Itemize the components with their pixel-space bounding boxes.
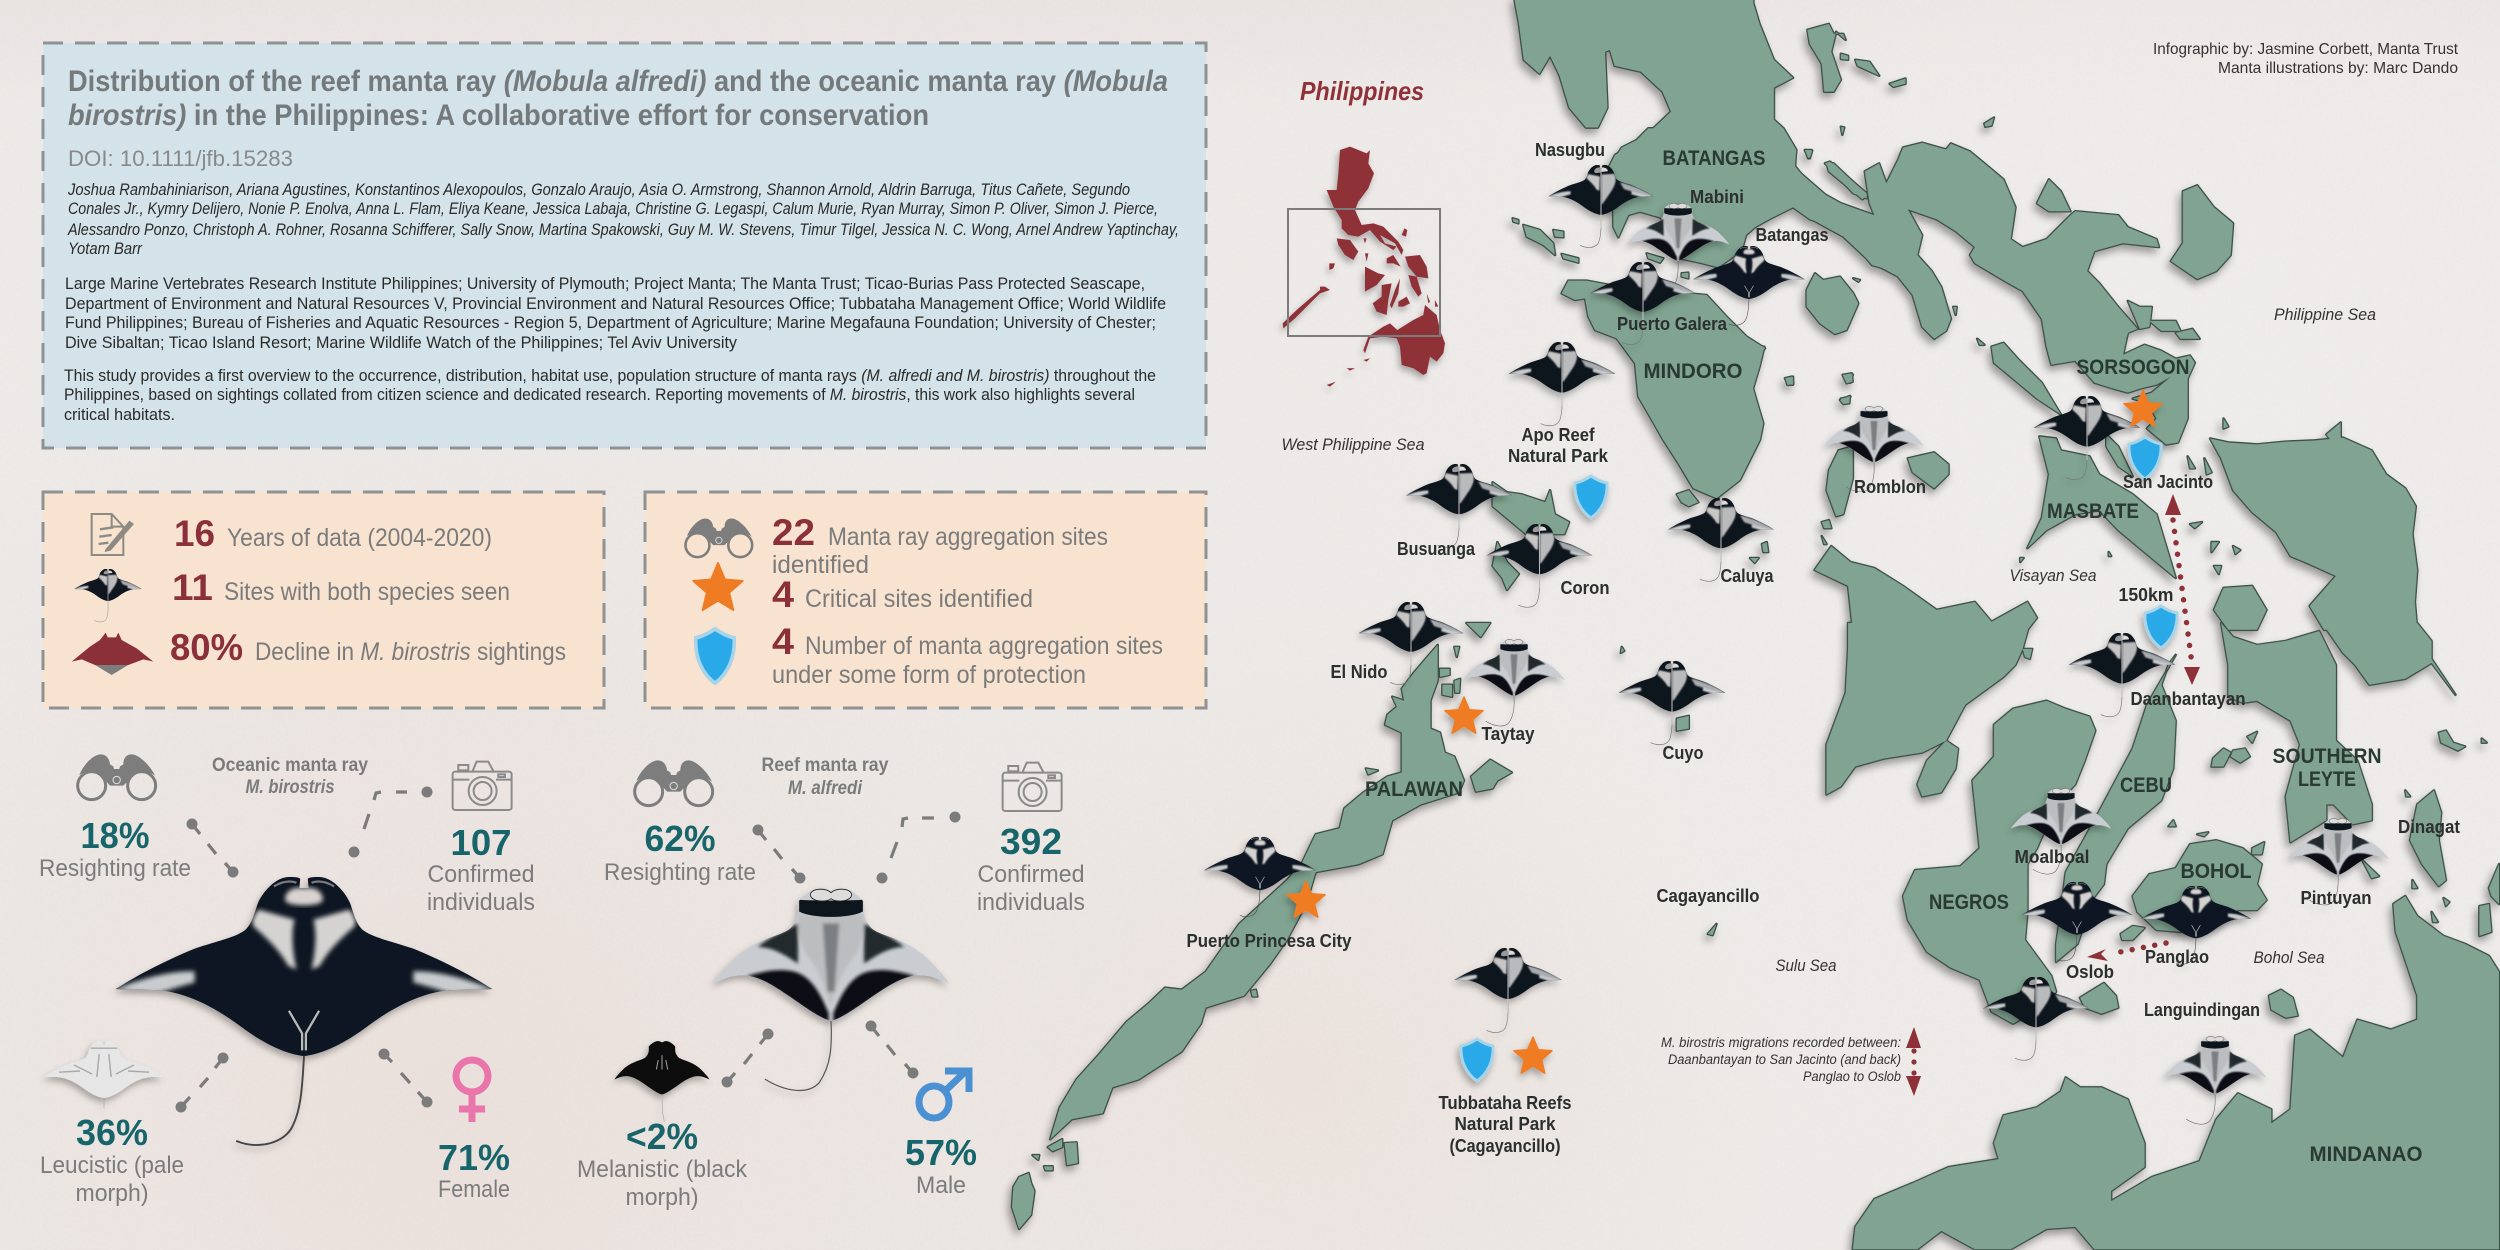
title bbox=[68, 65, 1168, 132]
locator frame bbox=[1288, 209, 1440, 336]
label: Tubbataha Reefs Natural Park: Natural Park bbox=[1454, 1114, 1556, 1134]
stat: 4 protected sites bbox=[772, 621, 1163, 689]
label: San Jacinto: San Jacinto bbox=[2123, 472, 2213, 492]
stat: female: 71% bbox=[438, 1137, 510, 1178]
label: Puerto Princesa City: Puerto Princesa City bbox=[1186, 931, 1352, 951]
locator map: Philippines bbox=[1283, 76, 1445, 387]
label: BOHOL: BOHOL bbox=[2180, 860, 2252, 883]
icon: declining manta bbox=[72, 633, 153, 675]
manta: Moalboal bbox=[2011, 788, 2111, 874]
manta: Mabini bbox=[1627, 203, 1729, 291]
label: Philippine Sea: Philippine Sea bbox=[2274, 305, 2376, 324]
manta: southern Negros bbox=[1982, 977, 2090, 1060]
stat: 80% decline: 80% bbox=[170, 627, 243, 668]
label: Romblon: Romblon bbox=[1854, 477, 1926, 497]
connector: female bbox=[378, 1048, 432, 1108]
panel: study summary bbox=[43, 43, 1206, 448]
stat: melanistic: <2% bbox=[626, 1116, 698, 1157]
manta: Pintuyan bbox=[2287, 818, 2389, 905]
manta: Romblon bbox=[1824, 406, 1924, 492]
icon: binoculars bbox=[635, 760, 713, 806]
study description: critical habitats. bbox=[64, 405, 175, 424]
label: Cagayancillo: Cagayancillo bbox=[1656, 886, 1760, 906]
label: SORSOGON: SORSOGON bbox=[2076, 356, 2190, 379]
panel: study stats bbox=[43, 492, 604, 708]
manta: Languindingan bbox=[2164, 1036, 2266, 1124]
connector: resighting bbox=[752, 824, 806, 884]
label: 150km: 150km bbox=[2118, 585, 2174, 605]
stat: resighting rate: Resighting rate bbox=[604, 859, 756, 886]
label: SOUTHERN LEYTE bbox=[2272, 745, 2382, 791]
stat: male: 57% bbox=[905, 1132, 977, 1173]
locator shape bbox=[1283, 147, 1445, 387]
credits bbox=[2153, 41, 2459, 77]
icon: binoculars bbox=[686, 518, 752, 557]
stat: melanistic bbox=[577, 1116, 748, 1211]
stat: confirmed individuals: Confirmed bbox=[978, 861, 1084, 888]
illustration: reef manta bbox=[713, 888, 949, 1090]
heading: oceanic manta ray: M. birostris bbox=[246, 777, 334, 798]
authors: Alessandro Ponzo, Christoph A. Rohner, Rosanna Schifferer, Sally Snow, Martina Spakowski, Guy M. W. Stevens, Timur Tilgel, Jessica N. C. Wong, Arnel Andrew Yaptinchay, bbox=[67, 220, 1179, 239]
legend: migrations bbox=[1661, 1027, 1921, 1096]
legend arrow bbox=[1906, 1027, 1921, 1096]
legend: migrations: Panglao to Oslob bbox=[1803, 1068, 1901, 1084]
label: Bohol Sea: Bohol Sea bbox=[2254, 948, 2324, 967]
manta: Daanbantayan bbox=[2068, 633, 2176, 717]
stat: 16 years bbox=[174, 513, 492, 554]
stat: resighting rate: Resighting rate bbox=[39, 855, 191, 882]
label: Pintuyan: Pintuyan bbox=[2300, 888, 2372, 908]
map markers: stars and shields bbox=[1287, 390, 2177, 1081]
manta: Puerto Princesa bbox=[1203, 837, 1317, 917]
shield: Apo Reef bbox=[1575, 476, 1607, 518]
label: SOUTHERN LEYTE: SOUTHERN bbox=[2272, 745, 2382, 768]
shield: Tubbataha bbox=[1461, 1039, 1493, 1081]
stat: resighting rate: 62% bbox=[644, 818, 716, 859]
icon: binoculars bbox=[78, 754, 156, 800]
stat: male bbox=[905, 1132, 977, 1199]
label: MINDORO: MINDORO bbox=[1644, 360, 1742, 383]
affiliations: Dive Sibaltan; Ticao Island Resort; Marine Wildlife Watch of the Philippines; Tel Aviv University bbox=[65, 333, 737, 352]
label: Tubbataha Reefs Natural Park bbox=[1438, 1093, 1572, 1156]
study description: This study provides a first overview to the occurrence, distribution, habitat use, population structure of manta rays (M. alfredi and M. birostris) throughout the bbox=[64, 366, 1156, 385]
heading: reef manta ray: Reef manta ray bbox=[762, 755, 889, 776]
label: Caluya: Caluya bbox=[1720, 566, 1774, 586]
study description bbox=[64, 366, 1156, 424]
stat: 22 aggregation sites: identified bbox=[772, 551, 869, 579]
label: Puerto Galera: Puerto Galera bbox=[1617, 314, 1728, 334]
illustration: leucistic manta bbox=[44, 1041, 164, 1108]
stat: confirmed individuals bbox=[427, 822, 535, 916]
panel: aggregation sites bbox=[645, 492, 1206, 708]
manta markers on map bbox=[1203, 165, 2389, 1124]
label: Cuyo: Cuyo bbox=[1662, 743, 1704, 763]
stat: confirmed individuals: individuals bbox=[427, 889, 535, 916]
icon: male symbol bbox=[919, 1071, 969, 1118]
stat: 22 aggregation sites bbox=[772, 512, 1108, 579]
illustration: oceanic manta bbox=[112, 877, 496, 1145]
label: Mabini: Mabini bbox=[1690, 187, 1744, 207]
stat: leucistic: Leucistic (pale bbox=[40, 1152, 184, 1179]
land: Visayas and Mindanao bbox=[1827, 623, 2499, 1249]
authors: Yotam Barr bbox=[68, 239, 143, 258]
stat: melanistic: Melanistic (black bbox=[577, 1156, 748, 1183]
arrow: Daanbantayan to San Jacinto bbox=[2165, 494, 2200, 685]
manta: Taytay bbox=[1463, 639, 1565, 726]
label: SOUTHERN LEYTE: LEYTE bbox=[2298, 768, 2356, 791]
panel: reef manta ray bbox=[577, 755, 1085, 1211]
connector: melanistic bbox=[722, 1028, 774, 1088]
stat: 80% decline bbox=[170, 627, 566, 668]
credits: Infographic by: Jasmine Corbett, Manta Trust bbox=[2153, 41, 2459, 58]
stat: confirmed individuals bbox=[977, 821, 1085, 916]
label: Taytay: Taytay bbox=[1482, 724, 1534, 744]
stat: female bbox=[438, 1137, 510, 1203]
manta: Busuanga bbox=[1405, 464, 1513, 547]
label: Busuanga: Busuanga bbox=[1397, 539, 1476, 559]
label: Nasugbu: Nasugbu bbox=[1535, 140, 1605, 160]
label: Sulu Sea: Sulu Sea bbox=[1776, 956, 1836, 975]
label: BATANGAS: BATANGAS bbox=[1662, 147, 1766, 170]
label: Coron: Coron bbox=[1560, 578, 1610, 598]
connector: resighting bbox=[186, 818, 238, 878]
icon: camera bbox=[453, 762, 512, 810]
manta: San Jacinto bbox=[2033, 396, 2141, 480]
affiliations bbox=[65, 274, 1166, 352]
manta: El Nido bbox=[1357, 602, 1465, 684]
icon: female symbol bbox=[456, 1060, 488, 1122]
arrow: Panglao to Oslob bbox=[2087, 943, 2166, 961]
heading: oceanic manta ray: Oceanic manta ray bbox=[212, 755, 368, 776]
star: Sorsogon bbox=[2124, 390, 2162, 426]
star: Taytay bbox=[1445, 697, 1483, 733]
label: Moalboal: Moalboal bbox=[2014, 847, 2090, 867]
label: Panglao: Panglao bbox=[2145, 947, 2209, 967]
label: Tubbataha Reefs Natural Park: (Cagayancillo) bbox=[1450, 1136, 1561, 1156]
DOI: DOI: 10.1111/jfb.15283 bbox=[68, 146, 293, 171]
stat: 4 critical sites: Critical sites identified bbox=[805, 585, 1033, 613]
manta: Oslob bbox=[2020, 882, 2134, 961]
stat: resighting rate: 18% bbox=[80, 815, 150, 856]
label: MINDANAO: MINDANAO bbox=[2310, 1143, 2422, 1166]
icon: shield bbox=[696, 629, 734, 683]
heading: oceanic manta ray bbox=[212, 755, 368, 798]
manta: Batangas bbox=[1692, 246, 1806, 325]
stat: 22 aggregation sites: 22 bbox=[772, 512, 815, 553]
icon: notebook bbox=[92, 514, 134, 555]
shield: San Jacinto bbox=[2129, 437, 2161, 479]
stat: 4 critical sites bbox=[772, 574, 1033, 615]
stat: 16 years: 16 bbox=[174, 513, 215, 554]
connector: leucistic bbox=[176, 1052, 228, 1112]
manta: Caluya bbox=[1667, 498, 1775, 581]
icon: camera bbox=[1003, 763, 1062, 811]
study description: Philippines, based on sightings collated from citizen science and dedicated research. Reporting movements of M. birostris, this work also highlights several bbox=[64, 385, 1135, 404]
connector: confirmed bbox=[876, 812, 960, 884]
title: birostris) in the Philippines: A collaborative effort for conservation bbox=[68, 99, 929, 132]
manta: Tubbataha bbox=[1453, 948, 1563, 1033]
manta: Cuyo bbox=[1618, 661, 1726, 745]
label: Daanbantayan: Daanbantayan bbox=[2130, 689, 2246, 709]
stat: leucistic bbox=[40, 1112, 184, 1207]
star: Puerto Princesa bbox=[1287, 881, 1325, 917]
stat: 4 protected sites: under some form of protection bbox=[772, 661, 1086, 689]
illustration: melanistic manta bbox=[614, 1041, 710, 1122]
stat: male: Male bbox=[916, 1172, 966, 1199]
credits: Manta illustrations by: Marc Dando bbox=[2218, 60, 2458, 77]
label: Apo Reef Natural Park: Apo Reef bbox=[1522, 425, 1595, 445]
stat: 11 sites: Sites with both species seen bbox=[224, 578, 510, 606]
connector: male bbox=[866, 1020, 918, 1078]
stat: leucistic: 36% bbox=[76, 1112, 148, 1153]
legend: migrations: Daanbantayan to San Jacinto (and back) bbox=[1668, 1051, 1901, 1067]
manta: Panglao bbox=[2140, 886, 2252, 964]
stat: confirmed individuals: Confirmed bbox=[428, 861, 534, 888]
stat: confirmed individuals: 392 bbox=[1000, 821, 1062, 862]
stat: 11 sites: 11 bbox=[172, 567, 213, 608]
heading: reef manta ray: M. alfredi bbox=[788, 778, 863, 799]
label: Dinagat: Dinagat bbox=[2398, 817, 2460, 837]
authors: Conales Jr., Kymry Delijero, Nonie P. Enolva, Anna L. Flam, Eliya Keane, Jessica Labaja, Christine G. Legaspi, Calum Murie, Ryan Murray, Simon P. Oliver, Simon J. Pierce, bbox=[68, 199, 1158, 218]
label: Apo Reef Natural Park: Natural Park bbox=[1508, 446, 1609, 466]
manta: Apo Reef bbox=[1508, 342, 1616, 426]
label: El Nido: El Nido bbox=[1330, 662, 1388, 682]
label: West Philippine Sea: West Philippine Sea bbox=[1282, 435, 1424, 454]
land: Palawan bbox=[1012, 623, 1716, 1229]
stat: confirmed individuals: 107 bbox=[450, 822, 512, 863]
manta: Nasugbu bbox=[1547, 165, 1655, 247]
stat: 4 critical sites: 4 bbox=[772, 574, 794, 615]
stat: resighting rate bbox=[39, 815, 191, 882]
stat: melanistic: morph) bbox=[626, 1184, 698, 1211]
label: CEBU: CEBU bbox=[2120, 774, 2172, 797]
icon: manta bbox=[74, 569, 142, 622]
star: Tubbataha bbox=[1514, 1037, 1552, 1073]
icon: star bbox=[693, 563, 743, 610]
map labels bbox=[1186, 41, 2460, 1166]
authors: Joshua Rambahiniarison, Ariana Agustines, Konstantinos Alexopoulos, Gonzalo Araujo, Asia O. Armstrong, Shannon Arnold, Aldrin Barruga, Titus Cañete, Segundo bbox=[67, 180, 1130, 199]
manta: Puerto Galera bbox=[1589, 262, 1697, 344]
label: Tubbataha Reefs Natural Park: Tubbataha Reefs bbox=[1438, 1093, 1572, 1113]
locator title: Philippines bbox=[1300, 76, 1424, 106]
label: Batangas: Batangas bbox=[1756, 225, 1828, 245]
panel: oceanic manta ray bbox=[39, 754, 535, 1207]
affiliations: Fund Philippines; Bureau of Fisheries and Aquatic Resources - Region 5, Department of Agriculture; Marine Megafauna Foundation; University of Chester; bbox=[65, 313, 1156, 332]
stat: leucistic: morph) bbox=[76, 1180, 148, 1207]
map: land masses bbox=[1012, 0, 2499, 1249]
stat: 4 protected sites: 4 bbox=[772, 621, 794, 662]
stat: resighting rate bbox=[604, 818, 756, 886]
stat: 80% decline: Decline in M. birostris sightings bbox=[255, 638, 566, 666]
affiliations: Large Marine Vertebrates Research Institute Philippines; University of Plymouth; Project Manta; The Manta Trust; Ticao-Burias Pass Protected Seascape, bbox=[65, 274, 1145, 293]
label: Apo Reef Natural Park bbox=[1508, 425, 1609, 466]
land: Batangas and Mindoro bbox=[1513, 128, 1902, 498]
title: Distribution of the reef manta ray (Mobula alfredi) and the oceanic manta ray (Mobula bbox=[68, 65, 1168, 98]
stat: 11 sites bbox=[172, 567, 510, 608]
manta: Coron bbox=[1485, 524, 1594, 607]
stat: 22 aggregation sites: Manta ray aggregation sites bbox=[828, 523, 1108, 551]
label: Visayan Sea: Visayan Sea bbox=[2010, 566, 2096, 585]
label: PALAWAN: PALAWAN bbox=[1365, 778, 1463, 801]
legend: migrations: M. birostris migrations recorded between: bbox=[1661, 1034, 1901, 1050]
stat: 16 years: Years of data (2004-2020) bbox=[227, 524, 492, 552]
land: Bicol, Masbate, Samar bbox=[1745, 0, 2417, 630]
label: NEGROS: NEGROS bbox=[1929, 891, 2009, 914]
label: MASBATE: MASBATE bbox=[2047, 500, 2139, 523]
affiliations: Department of Environment and Natural Resources V, Provincial Environment and Natural Resources Office; Tubbataha Management Office; World Wildlife bbox=[65, 294, 1166, 313]
heading: reef manta ray bbox=[762, 755, 889, 799]
stat: confirmed individuals: individuals bbox=[977, 889, 1085, 916]
stat: 4 protected sites: Number of manta aggregation sites bbox=[805, 632, 1163, 660]
authors bbox=[67, 180, 1179, 258]
label: Oslob: Oslob bbox=[2066, 962, 2114, 982]
shield: Daanbantayan bbox=[2145, 606, 2177, 648]
land: northwest, Luzon and Palawan north bbox=[1493, 0, 1753, 590]
label: Languindingan: Languindingan bbox=[2144, 1000, 2260, 1020]
stat: female: Female bbox=[438, 1176, 510, 1203]
connector: confirmed bbox=[348, 786, 432, 858]
